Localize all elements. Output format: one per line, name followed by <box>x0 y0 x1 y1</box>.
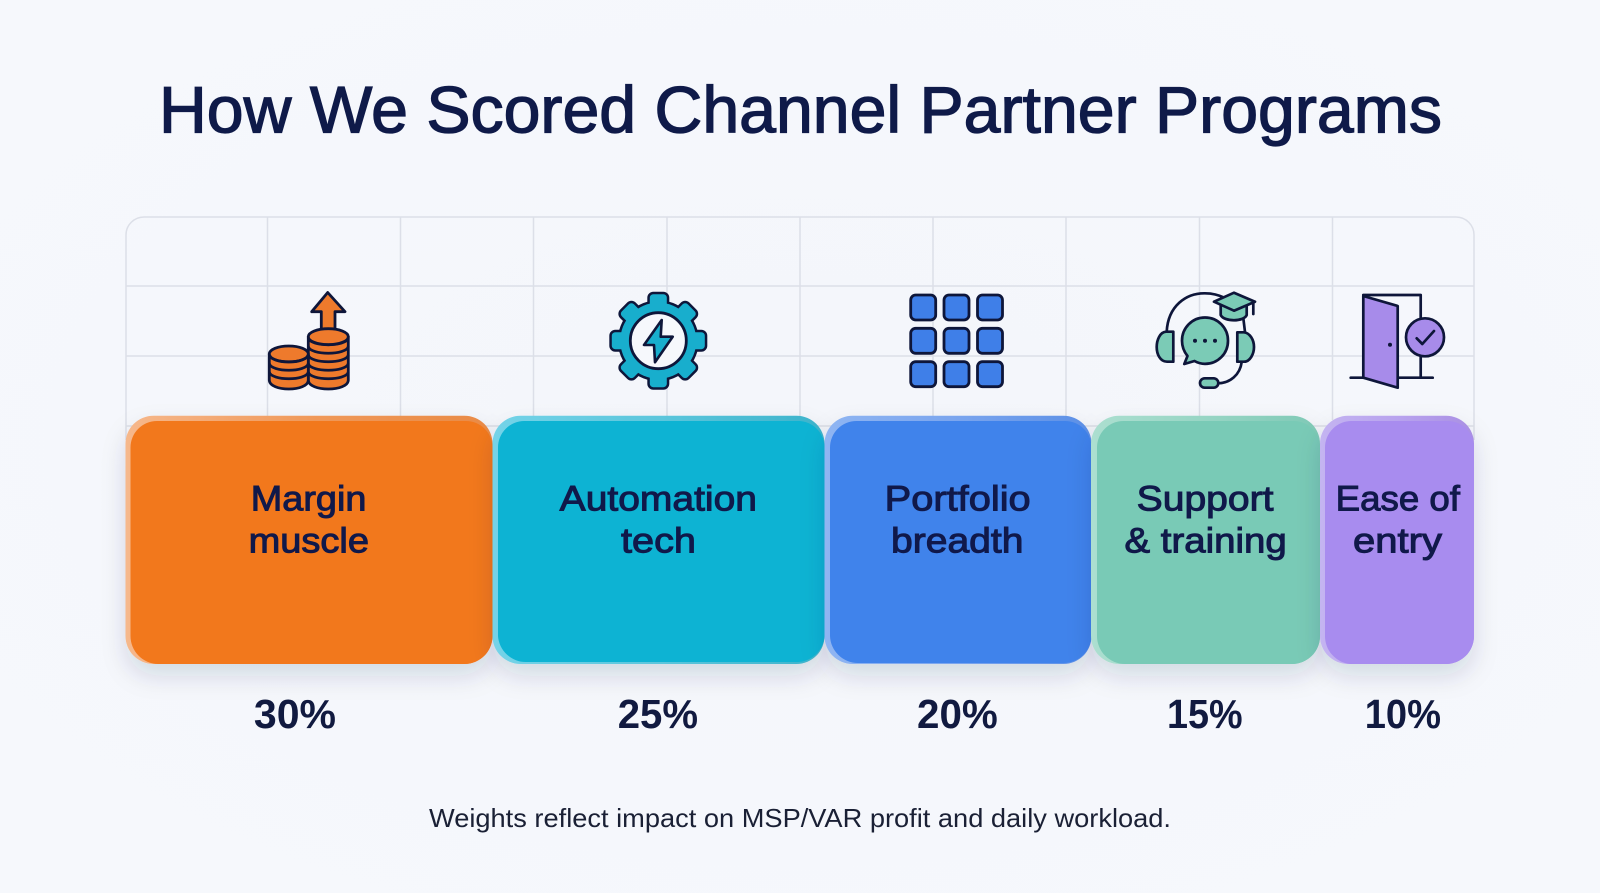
label: Ease of entry: Ease of <box>1336 480 1460 519</box>
weight: 30%: 30% <box>254 691 336 737</box>
icon: gear with lightning bolt <box>612 294 705 387</box>
weight: 20%: 20% <box>917 691 998 737</box>
weight: 10%: 10% <box>1365 691 1441 737</box>
weight: 25%: 25% <box>618 691 698 737</box>
footnote: Weights reflect impact on MSP/VAR profit and daily workload. <box>429 803 1171 833</box>
weight: 15%: 15% <box>1167 691 1243 737</box>
icon: open door with check <box>1351 295 1444 388</box>
label: Automation tech: tech <box>621 522 696 561</box>
label: Margin muscle: muscle <box>249 522 369 561</box>
bar segment: Margin muscle <box>126 416 493 664</box>
icon: support headset with graduation cap <box>1157 293 1255 388</box>
label: Ease of entry <box>1336 480 1460 561</box>
label: Margin muscle <box>249 480 369 561</box>
icon: coins with up arrow <box>269 292 348 389</box>
bar segment: Ease of entry <box>1320 416 1474 664</box>
label: Support and training: & training <box>1124 522 1287 561</box>
label: Automation tech: Automation <box>560 480 757 519</box>
label: Ease of entry: entry <box>1353 522 1443 561</box>
label: Support and training: Support <box>1137 480 1274 519</box>
bar segment: Portfolio breadth <box>824 416 1092 664</box>
label: Portfolio breadth: breadth <box>891 522 1024 561</box>
grid panel <box>126 217 1474 440</box>
label: Automation tech <box>560 480 757 561</box>
label: Support and training <box>1124 480 1287 561</box>
bar segment: Support and training <box>1091 416 1320 664</box>
label: Margin muscle: Margin <box>251 480 366 519</box>
bar segment: Automation tech <box>492 416 824 664</box>
label: Portfolio breadth: Portfolio <box>885 480 1031 519</box>
icon: nine-square grid <box>911 295 1002 387</box>
label: Portfolio breadth <box>885 480 1031 561</box>
title: How We Scored Channel Partner Programs <box>159 73 1442 147</box>
